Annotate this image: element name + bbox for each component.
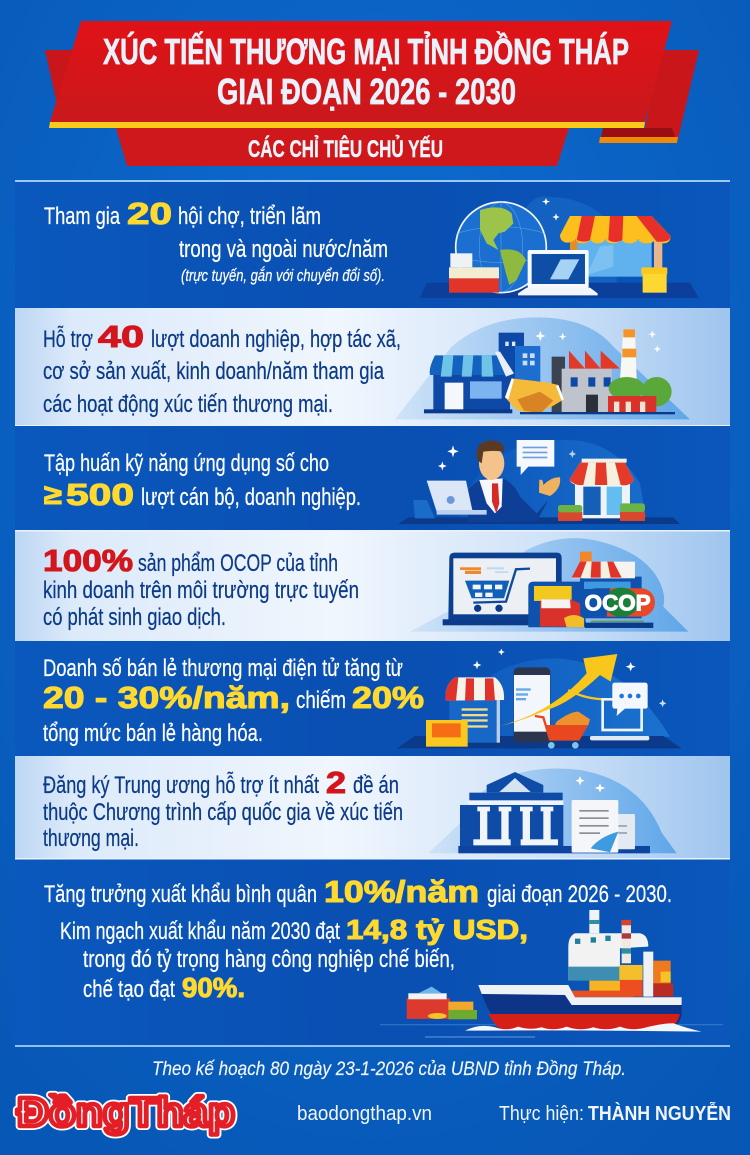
platform (398, 517, 680, 524)
illustration: government building (428, 768, 677, 853)
panel text: support (43, 319, 401, 418)
sparkles (535, 331, 661, 353)
panel text: exports: trong đó tỷ trọng hàng công nghiệp chế biến, (83, 946, 455, 973)
building (499, 333, 540, 383)
banner main ribbon (50, 21, 672, 122)
planters (558, 503, 645, 521)
panel text: OCOP: kinh doanh trên môi trường trực tuyến (43, 577, 359, 604)
title text (103, 30, 629, 112)
credit: THÀNH NGUYỄN (588, 1102, 731, 1125)
panel: support businesses (15, 308, 730, 426)
phone (514, 667, 550, 743)
trees (609, 377, 672, 406)
panel: digital skill training (15, 426, 730, 530)
panel text: exports: giai đoạn 2026 - 2030. (487, 881, 672, 908)
panel: e-commerce (15, 641, 730, 756)
panel text: fairs: Tham gia (44, 203, 120, 230)
sparkles (542, 198, 560, 221)
shop (424, 352, 514, 413)
illustration: presenter and shop (398, 440, 680, 524)
panel text: e-commerce: tổng mức bán lẻ hàng hóa. (43, 720, 263, 747)
banner sub ribbon (116, 128, 569, 166)
panel text: national programme: 2 (326, 765, 346, 800)
panel text: support: 40 (98, 319, 144, 354)
panel text: exports: Kim ngạch xuất khẩu năm 2030 đạt (60, 918, 340, 945)
sparkles (473, 649, 666, 707)
panel text: training (44, 450, 361, 512)
boxes (449, 253, 499, 293)
panel text: national programme: thương mại. (43, 825, 139, 852)
panel text: OCOP: có phát sinh giao dịch. (43, 604, 226, 631)
banner right wing (599, 50, 699, 143)
panel text: national programme: Đăng ký Trung ương hỗ trợ ít nhất (43, 772, 319, 799)
stand (641, 267, 667, 293)
title text: GIAI ĐOẠN 2026 - 2030 (217, 71, 516, 112)
panel text: exports: chế tạo đạt (83, 976, 175, 1003)
small boat cargo (407, 987, 477, 1019)
globe (456, 202, 546, 293)
wallet box (426, 720, 468, 747)
panel text: OCOP: sản phẩm OCOP của tỉnh (138, 550, 338, 577)
documents (572, 800, 635, 853)
panel text: exports: 90%. (182, 972, 245, 1003)
panel text: fairs: 20 (127, 196, 172, 231)
panel text: support: các hoạt động xúc tiến thương mại. (43, 391, 333, 418)
ship hull (478, 985, 682, 1031)
laptop (518, 250, 598, 295)
containers (572, 952, 673, 997)
illustration: shop, handshake, factory (395, 317, 690, 419)
panel text: fairs: (trực tuyến, gắn với chuyển đổi số). (181, 266, 385, 285)
banner left wing (45, 50, 75, 104)
platform (420, 283, 699, 298)
panel text: exports: 10%/năm (324, 874, 479, 909)
panel text: exports: 14,8 tỷ USD, (346, 914, 528, 945)
ship superstructure (568, 910, 648, 981)
panel: national programme (15, 756, 730, 860)
laptop and chat (590, 683, 649, 740)
growth arrow (500, 654, 617, 726)
panel text: national programme: thuộc Chương trình cấp quốc gia về xúc tiến (43, 799, 403, 826)
panel: fairs (15, 182, 730, 308)
shopping cart (535, 712, 590, 749)
laptop (413, 481, 487, 518)
divider (15, 180, 730, 182)
panel text: training: Tập huấn kỹ năng ứng dụng số cho (44, 450, 329, 477)
speech bubble (517, 440, 554, 475)
panel: OCOP (15, 530, 730, 641)
waves (465, 1023, 702, 1032)
panel text: fairs: hội chợ, triển lãm (178, 203, 321, 230)
monitor (443, 553, 562, 625)
wallet (528, 582, 587, 627)
panel text: e-commerce: 20 - 30%/năm, (43, 680, 290, 715)
shop and stand (572, 552, 642, 618)
shop (560, 216, 671, 277)
panel text: e-commerce: 20% (352, 680, 424, 715)
shop (569, 459, 634, 518)
logo: ĐồngTháp (17, 1089, 235, 1135)
chimney (620, 329, 637, 379)
sparkles (438, 445, 576, 471)
panel text: e-commerce (43, 655, 424, 747)
panel text: fairs (44, 196, 388, 285)
panel text: exports: Tăng trưởng xuất khẩu bình quân (44, 881, 317, 908)
presenter (468, 441, 560, 522)
water highlight (380, 1024, 723, 1025)
small red building (608, 396, 656, 413)
backdrop dome (410, 538, 688, 632)
panel text: e-commerce: Doanh số bán lẻ thương mại điện tử tăng từ (43, 655, 403, 682)
subtitle: CÁC CHỈ TIÊU CHỦ YẾU (248, 134, 443, 163)
website: baodongthap.vn (297, 1103, 432, 1125)
panel text: OCOP: 100% (43, 543, 133, 578)
OCOP badge: OCOP (585, 590, 651, 615)
panel text: exports (44, 874, 672, 1003)
panel text: e-commerce: chiếm (296, 687, 346, 714)
platform (397, 736, 682, 748)
building (458, 772, 650, 853)
panel text: support: cơ sở sản xuất, kinh doanh/năm tham gia (43, 358, 384, 385)
divider (15, 1045, 730, 1047)
store (445, 677, 504, 743)
backdrop dome (395, 317, 690, 419)
panel text: training: 500 (66, 477, 134, 512)
panel text: support: lượt doanh nghiệp, hợp tác xã, (151, 326, 401, 353)
credit (499, 1102, 731, 1125)
factory (552, 351, 620, 413)
illustration: e-commerce growth (397, 649, 682, 749)
sparkles (575, 776, 605, 793)
handshake (505, 378, 564, 414)
banner yellow strip (49, 122, 645, 128)
illustration: cargo ship (380, 910, 723, 1038)
source note: Theo kế hoạch 80 ngày 23-1-2026 của UBND tỉnh Đồng Tháp. (152, 1059, 626, 1080)
panel text: national programme: đề án (353, 772, 399, 799)
illustration: online store OCOP (410, 538, 688, 632)
panel text: support: Hỗ trợ (43, 326, 93, 353)
panel text: training: ≥ (44, 479, 62, 510)
panel text: national programme (43, 765, 403, 852)
cart (473, 569, 530, 603)
panel text: fairs: trong và ngoài nước/năm (179, 236, 388, 263)
backdrop dome (428, 768, 677, 853)
panel: exports (15, 860, 730, 1046)
title banner (45, 21, 699, 166)
credit: Thực hiện: (499, 1103, 584, 1125)
panel text: OCOP (43, 543, 359, 631)
logo: ĐồngTháp (17, 1089, 235, 1135)
illustration: globe and shop (420, 197, 699, 298)
panel text: training: lượt cán bộ, doanh nghiệp. (141, 484, 361, 511)
